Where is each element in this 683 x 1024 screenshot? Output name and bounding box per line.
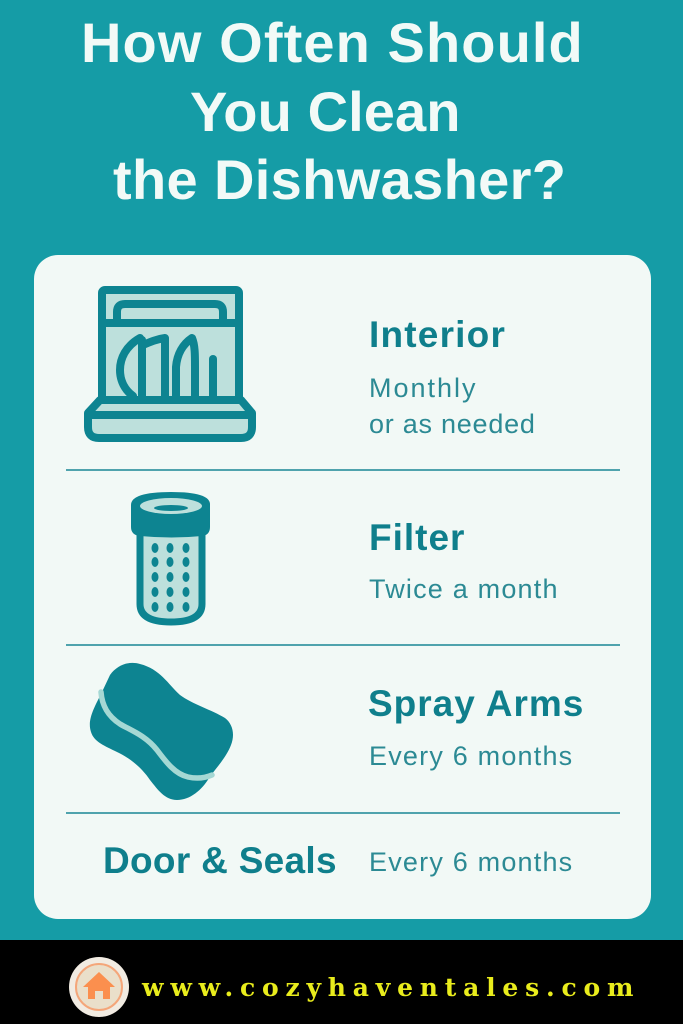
label: door and seals: Door & Seals [103, 840, 337, 881]
icon: sponge [90, 662, 233, 800]
icon: dishwasher [84, 286, 256, 442]
frequency: interior: or as needed [369, 409, 536, 439]
title: the Dishwasher? [113, 148, 566, 211]
icon: home logo [69, 957, 129, 1017]
frequency: spray arms: Every 6 months [369, 741, 573, 771]
label: filter: Filter [369, 517, 465, 558]
frequency: filter: Twice a month [369, 574, 559, 604]
title: You Clean [190, 80, 461, 143]
icon: filter [131, 492, 210, 626]
title: How Often Should [81, 11, 584, 74]
frequency: interior [369, 373, 536, 439]
label: interior: Interior [369, 314, 506, 355]
label: spray arms: Spray Arms [368, 683, 584, 724]
frequency: door and seals: Every 6 months [369, 847, 573, 877]
frequency: interior: Monthly [369, 373, 478, 403]
title [81, 11, 584, 211]
website url: www.cozyhaventales.com [142, 973, 640, 1002]
panel: cleaning schedule [34, 255, 651, 919]
footer bar [0, 940, 683, 1024]
